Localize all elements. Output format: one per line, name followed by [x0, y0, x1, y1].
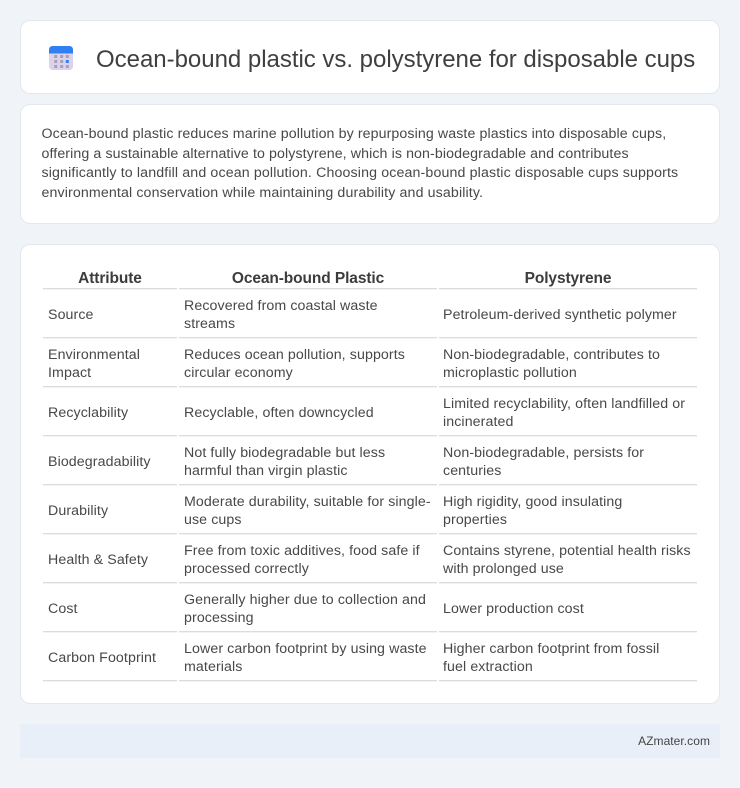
- panel: comparison table: [20, 244, 720, 704]
- Carbon Footprint: polystyrene: fuel extraction: [443, 659, 533, 675]
- Biodegradability: polystyrene: centuries: [443, 463, 501, 479]
- Durability: ocean-bound: [184, 494, 431, 528]
- Durability: polystyrene: properties: [443, 512, 507, 528]
- row: Recyclability: Recyclability: [48, 405, 128, 421]
- Recyclability: polystyrene: [443, 396, 685, 430]
- row: Environmental Impact: [48, 347, 140, 381]
- column header: Polystyrene: Polystyrene: [525, 270, 611, 287]
- Durability: polystyrene: High rigidity, good insulating: [443, 494, 622, 510]
- Durability: ocean-bound: Moderate durability, suitable for single-: [184, 494, 431, 510]
- row: Environmental Impact: Environmental: [48, 347, 140, 363]
- Recyclability: polystyrene: incinerated: [443, 414, 514, 430]
- row: Carbon Footprint: Carbon Footprint: [48, 650, 156, 666]
- intro text: [42, 126, 678, 200]
- Carbon Footprint: ocean-bound: [184, 641, 427, 675]
- Carbon Footprint: ocean-bound: materials: [184, 659, 242, 675]
- Health & Safety: polystyrene: with prolonged use: [443, 561, 564, 577]
- row: Cost: Cost: [48, 601, 78, 617]
- intro text: significantly to landfill and ocean pollution. Choosing ocean-bound plastic disposable cups supports: [42, 165, 678, 181]
- Source: ocean-bound: streams: [184, 316, 235, 332]
- Recyclability: ocean-bound: Recyclable, often downcycled: [184, 405, 374, 421]
- intro text: environmental conservation while maintaining durability and usability.: [42, 184, 483, 200]
- row: Health & Safety: Health & Safety: [48, 552, 148, 568]
- Cost: ocean-bound: processing: [184, 610, 254, 626]
- Health & Safety: ocean-bound: Free from toxic additives, food safe if: [184, 543, 420, 559]
- Durability: polystyrene: [443, 494, 622, 528]
- Environmental Impact: ocean-bound: [184, 347, 405, 381]
- column header: Ocean-bound Plastic: Ocean-bound Plastic: [232, 270, 384, 287]
- title: Ocean-bound plastic vs. polystyrene for disposable cups: [96, 46, 695, 73]
- row: Environmental Impact: Impact: [48, 365, 91, 381]
- Source: polystyrene: Petroleum-derived synthetic polymer: [443, 307, 677, 323]
- column header: Attribute: Attribute: [78, 270, 142, 287]
- Biodegradability: ocean-bound: Not fully biodegradable but less: [184, 445, 385, 461]
- Environmental Impact: ocean-bound: Reduces ocean pollution, supports: [184, 347, 405, 363]
- intro panel: [20, 104, 720, 224]
- Biodegradability: polystyrene: [443, 445, 644, 479]
- row: Biodegradability: Biodegradability: [48, 454, 151, 470]
- header panel: [20, 20, 720, 94]
- Source: ocean-bound: [184, 298, 378, 332]
- Environmental Impact: ocean-bound: circular economy: [184, 365, 293, 381]
- Health & Safety: ocean-bound: processed correctly: [184, 561, 309, 577]
- Carbon Footprint: polystyrene: Higher carbon footprint from fossil: [443, 641, 659, 657]
- Durability: ocean-bound: use cups: [184, 512, 242, 528]
- row: Durability: Durability: [48, 503, 108, 519]
- Environmental Impact: polystyrene: [443, 347, 660, 381]
- Biodegradability: ocean-bound: harmful than virgin plastic: [184, 463, 348, 479]
- intro text: Ocean-bound plastic reduces marine pollution by repurposing waste plastics into disposable cups,: [42, 126, 666, 142]
- row: Source: Source: [48, 307, 94, 323]
- Health & Safety: ocean-bound: [184, 543, 420, 577]
- Source: ocean-bound: Recovered from coastal waste: [184, 298, 378, 314]
- footer credit: AZmater.com: [638, 734, 710, 748]
- Cost: ocean-bound: [184, 592, 426, 626]
- Environmental Impact: polystyrene: microplastic pollution: [443, 365, 577, 381]
- Cost: ocean-bound: Generally higher due to collection and: [184, 592, 426, 608]
- Biodegradability: ocean-bound: [184, 445, 385, 479]
- intro text: offering a sustainable alternative to polystyrene, which is non-biodegradable and contributes: [42, 146, 629, 162]
- footer bar: [20, 724, 720, 758]
- Carbon Footprint: polystyrene: [443, 641, 659, 675]
- icon: calendar: [49, 46, 73, 70]
- Cost: polystyrene: Lower production cost: [443, 601, 584, 617]
- Environmental Impact: polystyrene: Non-biodegradable, contributes to: [443, 347, 660, 363]
- Health & Safety: polystyrene: Contains styrene, potential health risks: [443, 543, 691, 559]
- Health & Safety: polystyrene: [443, 543, 691, 577]
- Carbon Footprint: ocean-bound: Lower carbon footprint by using waste: [184, 641, 427, 657]
- Recyclability: polystyrene: Limited recyclability, often landfilled or: [443, 396, 685, 412]
- Biodegradability: polystyrene: Non-biodegradable, persists for: [443, 445, 644, 461]
